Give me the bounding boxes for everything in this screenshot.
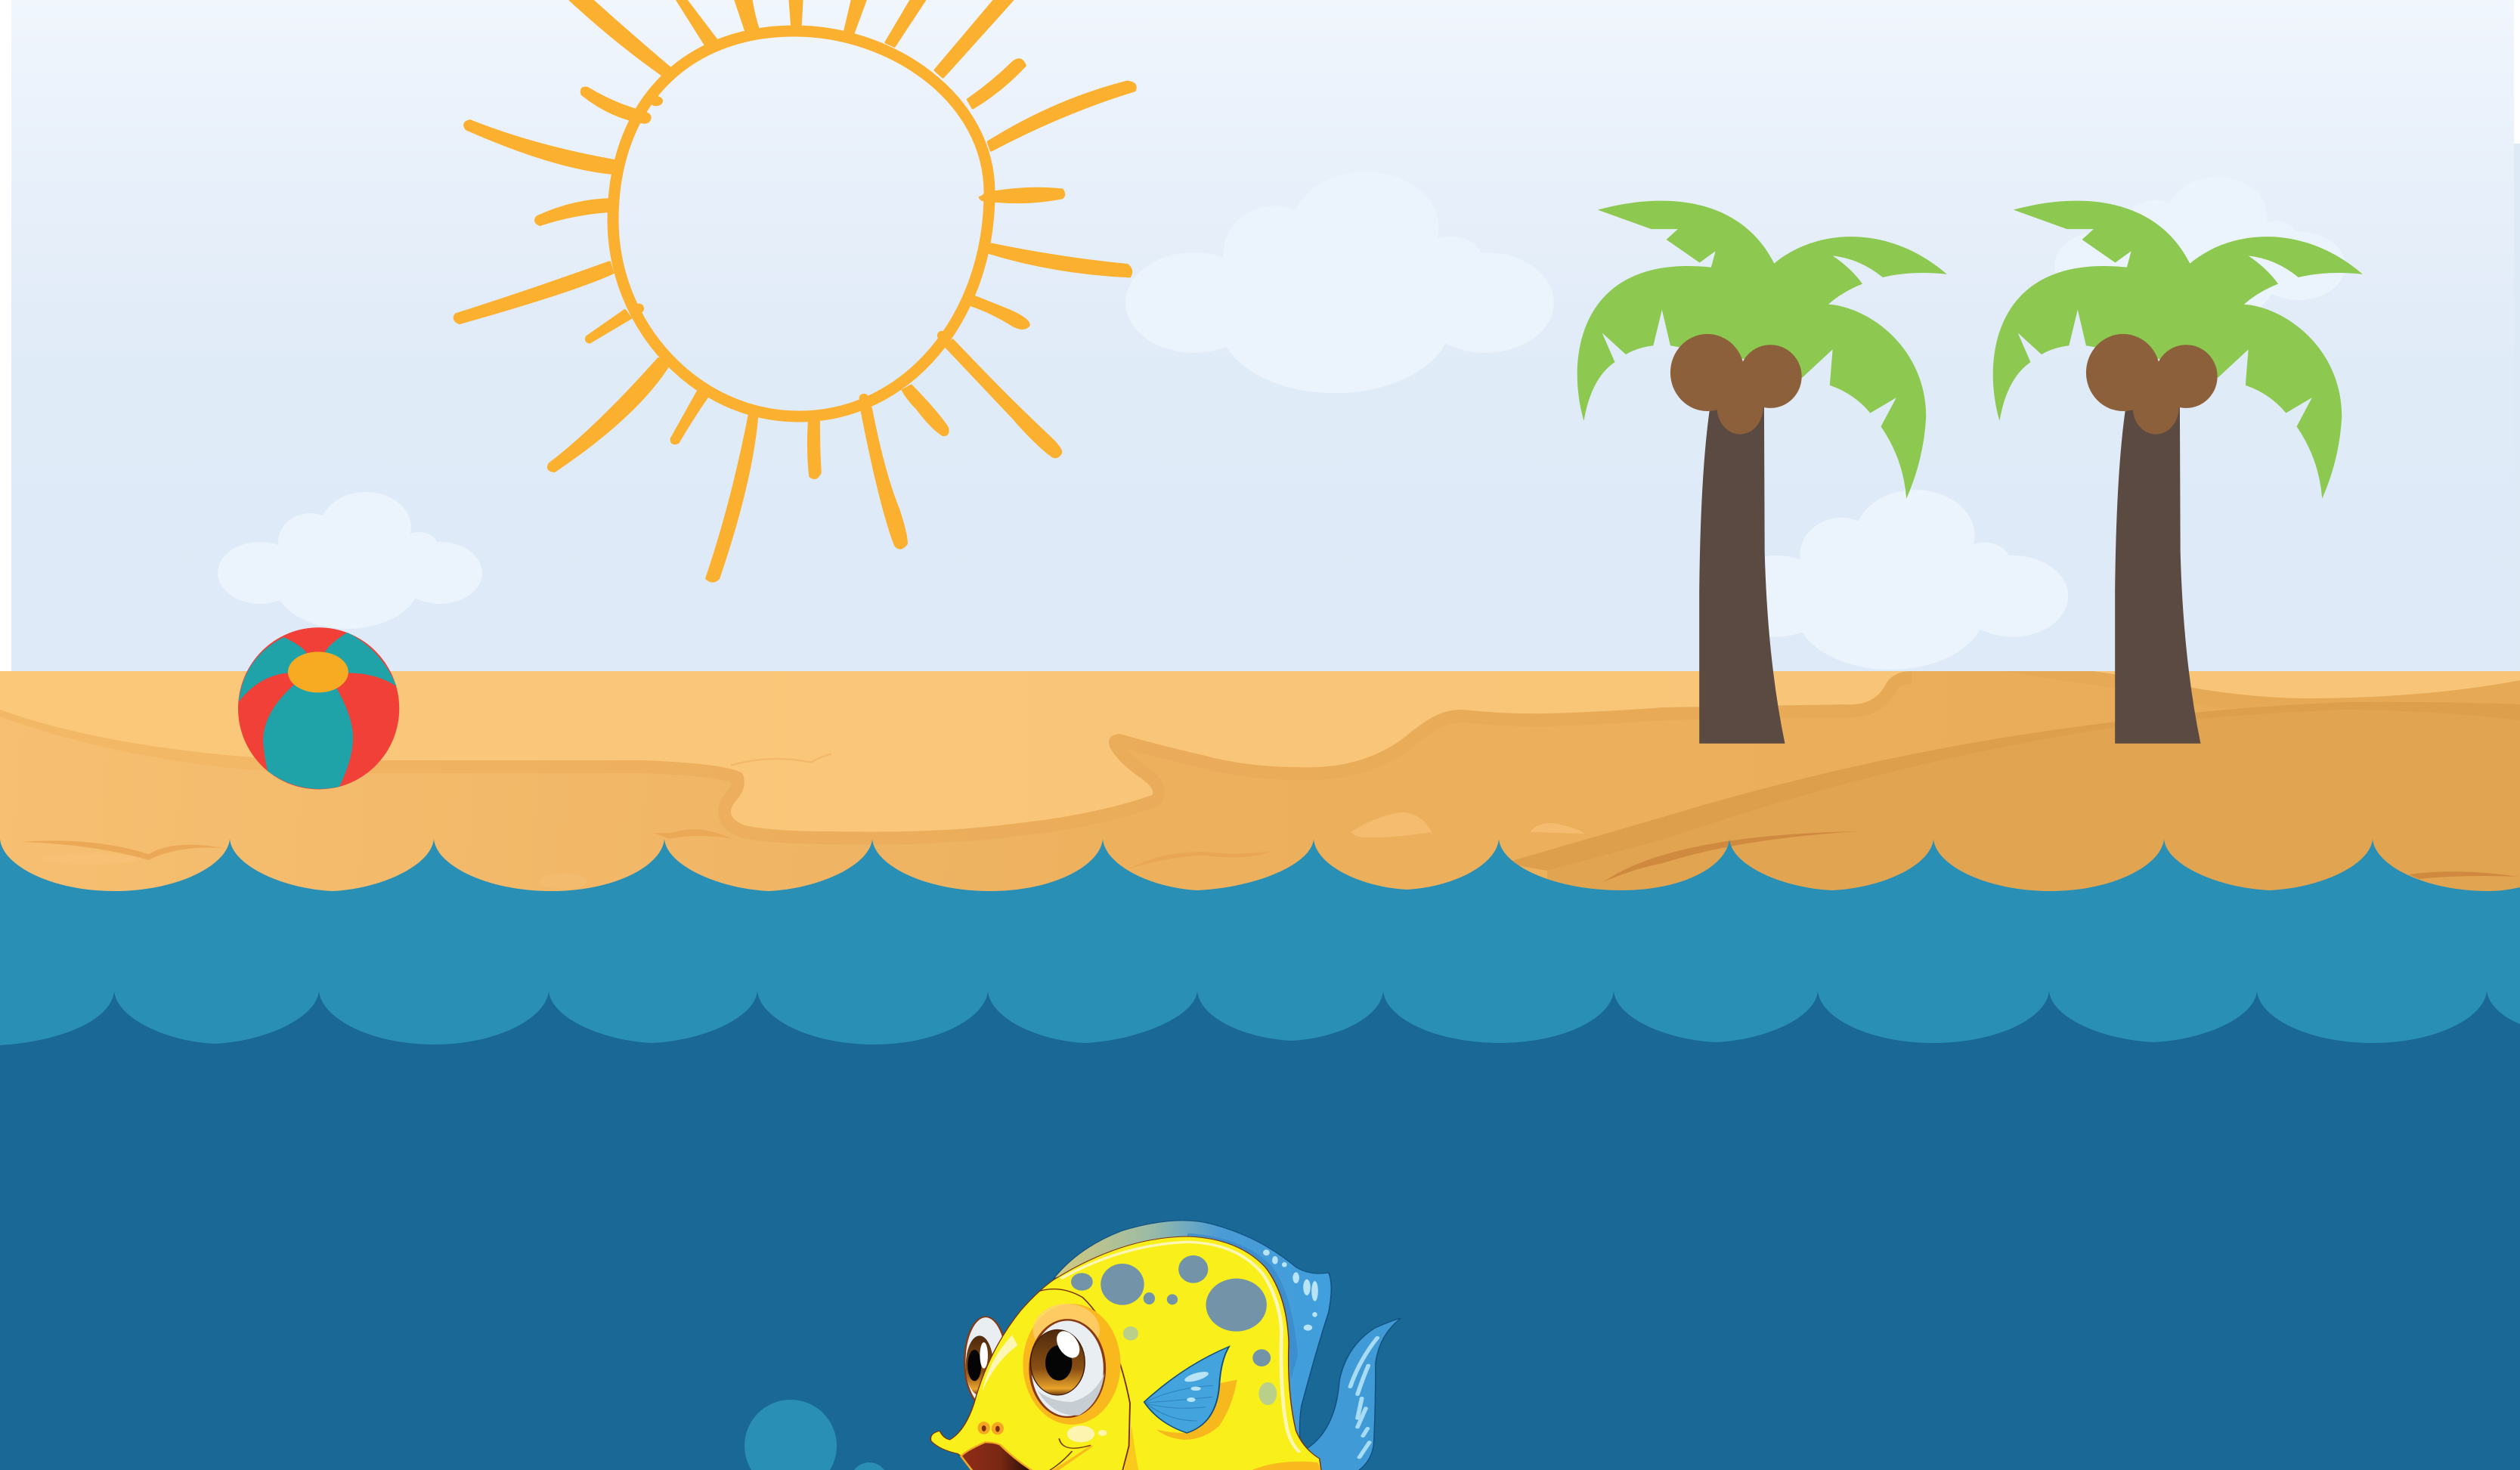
fish dorsal fin: [1054, 1221, 1331, 1451]
sun rays: [455, 0, 1135, 581]
cloud: centre: [1125, 172, 1554, 393]
sand marks: left: [21, 754, 831, 889]
sand: long ridge: [1504, 702, 2520, 871]
cloud: top right: [2054, 177, 2345, 327]
sand: ridge shadow band: [265, 760, 822, 843]
fish nostrils: [978, 1422, 1004, 1434]
fish spots: [1071, 1255, 1277, 1405]
icon: bubble small: [850, 1462, 888, 1470]
fish gill line: [1039, 1289, 1130, 1470]
fish belly shade: [1249, 1462, 1321, 1470]
fish tail: [1303, 1318, 1401, 1470]
panel: sand: [0, 671, 2520, 899]
fish gill shade: [1124, 1426, 1138, 1470]
icon: palm tree right: [1993, 201, 2363, 744]
sand: far dune light area: [2094, 671, 2520, 698]
fish cheek highlights: [1067, 1425, 1107, 1442]
icon: bubble large: [745, 1400, 837, 1470]
cloud: lower right: [1720, 490, 2068, 670]
fish body highlight: [1061, 1242, 1299, 1453]
icon: palm tree left: [1577, 201, 1947, 744]
fish far eye: [964, 1317, 1007, 1407]
sand: light upper area: [0, 671, 1912, 832]
sand: far dune band: [2001, 671, 2520, 709]
sand marks: scratches: [1603, 831, 2518, 882]
fish near eye: [1023, 1304, 1121, 1425]
deep water: [0, 991, 2520, 1470]
sky: [11, 0, 2520, 671]
fish body: [930, 1236, 1321, 1470]
fish head highlight: [982, 1335, 1017, 1392]
icon: yellow fish: [930, 1221, 1401, 1470]
sun ring: [613, 31, 989, 416]
fish pectoral fin: [1144, 1347, 1237, 1440]
icon: sun: [455, 0, 1135, 581]
cloud: lower left: [218, 492, 482, 629]
sand marks: centre: [1128, 812, 1586, 869]
shallow water: [0, 839, 2520, 1470]
sand: ridge taper at left edge: [0, 710, 265, 771]
fish mouth: [961, 1438, 1094, 1470]
icon: beach ball: [238, 627, 399, 789]
sand: darker lower right area: [1547, 710, 2520, 899]
